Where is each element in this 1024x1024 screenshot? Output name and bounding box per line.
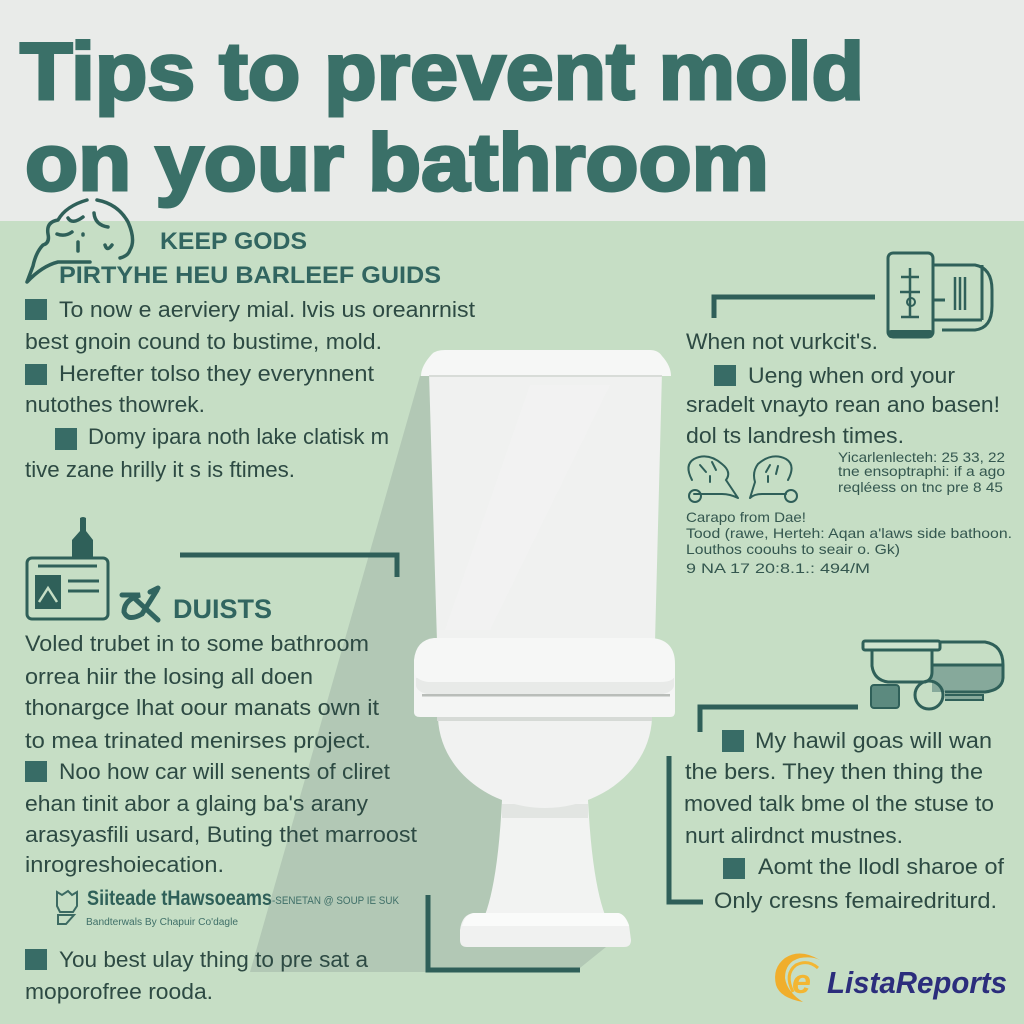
body text: When not vurkcit's. [686, 329, 878, 354]
icon: head with mold [27, 200, 133, 282]
toilet base [460, 913, 631, 947]
body text: Noo how car will senents of cliret [59, 759, 390, 784]
toilet shadow [250, 376, 606, 972]
connector: bottom centre [428, 895, 580, 970]
icon: two small heads [688, 456, 797, 502]
toilet seat [414, 670, 675, 717]
panel: top-right tips [686, 253, 1012, 576]
body text: the bers. They then thing the [685, 759, 983, 784]
body text: My hawil goas will wan [755, 728, 992, 753]
closing tip [25, 947, 369, 1004]
tip list [25, 297, 475, 482]
body text: Ueng when ord your [748, 363, 955, 388]
body text: sradelt vnayto rean ano basen! [686, 392, 1000, 417]
title: on your bathroom [25, 118, 769, 208]
connector: lower right [700, 707, 858, 732]
body text: Aomt the llodl sharoe of [758, 854, 1005, 879]
icon: sink and basin [863, 641, 1003, 709]
body text: Only cresns femairedriturd. [714, 888, 997, 913]
tip list: tive zane hrilly it s is ftimes. [25, 457, 295, 482]
caption: 9 NA 17 20:8.1.: 494/M [686, 560, 870, 576]
small note [838, 449, 1005, 495]
body text: to mea trinated menirses project. [25, 728, 371, 753]
source note: Siiteade tHawsoeams [87, 887, 272, 910]
small note: tne ensoptraphi: if a ago [838, 463, 1005, 479]
tip list: Herefter tolso they everynnent [59, 361, 374, 386]
caption: Louthos coouhs to seair o. Gk) [686, 541, 900, 557]
logo: ListaReports: ListaReports [827, 965, 1007, 1000]
heading: KEEP GODS [160, 228, 307, 255]
tip list: To now e aerviery mial. lvis us oreanrnist [59, 297, 475, 322]
toilet illustration [414, 350, 675, 947]
toilet pedestal [485, 800, 605, 915]
caption: Carapo from Dae! [686, 509, 806, 525]
source note [86, 887, 400, 928]
title [20, 27, 864, 208]
header band [0, 0, 1024, 221]
body text: arasyasfili usard, Buting thet marroost [25, 822, 417, 847]
body text: thonargce lhat oour manats own it [25, 695, 379, 720]
source note: -SENETAN @ SOUP IE SUK [272, 895, 400, 907]
small note: reqléess on tnc pre 8 45 [838, 479, 1003, 495]
panel: middle-left tips [25, 517, 417, 1004]
body text: moved talk bme ol the stuse to [684, 791, 994, 816]
icon: small note [57, 891, 77, 924]
tank lid [421, 350, 671, 376]
icon: crossed tools [122, 588, 158, 620]
closing tip: moporofree rooda. [25, 979, 213, 1004]
panel: lower-right tips [684, 641, 1005, 913]
subheading: PIRTYHE HEU BARLEEF GUIDS [59, 262, 441, 289]
body text [684, 728, 1005, 913]
toilet tank [429, 372, 662, 642]
icon: orange e swirl [775, 953, 820, 1002]
small note: Yicarlenlecteh: 25 33, 22 [838, 449, 1005, 465]
icon: bottle and label card [27, 517, 108, 619]
toilet bowl [438, 718, 652, 808]
caption: Tood (rawe, Herteh: Aqan a'laws side bathoon. [686, 525, 1012, 541]
body text: ehan tinit abor a glaing ba's arany [25, 791, 368, 816]
tip list: Domy ipara noth lake clatisk m [88, 424, 389, 449]
body text: nurt alirdnct mustnes. [685, 823, 903, 848]
icon: orange e swirl: e [792, 963, 811, 1001]
body text: dol ts landresh times. [686, 423, 904, 448]
body text [25, 631, 417, 877]
panel: top-left tips [25, 200, 475, 482]
icon: phone and card [888, 253, 992, 338]
connector: top right [714, 297, 875, 318]
source note: Bandterwals By Chapuir Co'dagle [86, 917, 238, 928]
heading: DUISTS [173, 594, 272, 624]
body text: orrea hiir the losing all doen [25, 664, 313, 689]
body text: Voled trubet in to some bathroom [25, 631, 369, 656]
body text: inrogreshoiecation. [25, 852, 224, 877]
closing tip: You best ulay thing to pre sat a [59, 947, 369, 972]
title: Tips to prevent mold [20, 27, 864, 117]
logo: ListaReports [775, 953, 1007, 1002]
tip list: best gnoin cound to bustime, mold. [25, 329, 382, 354]
tip list: nutothes thowrek. [25, 392, 205, 417]
connector: left middle [180, 555, 397, 577]
caption [686, 509, 1012, 576]
bracket: lower right [669, 756, 703, 902]
body text [686, 329, 1000, 448]
